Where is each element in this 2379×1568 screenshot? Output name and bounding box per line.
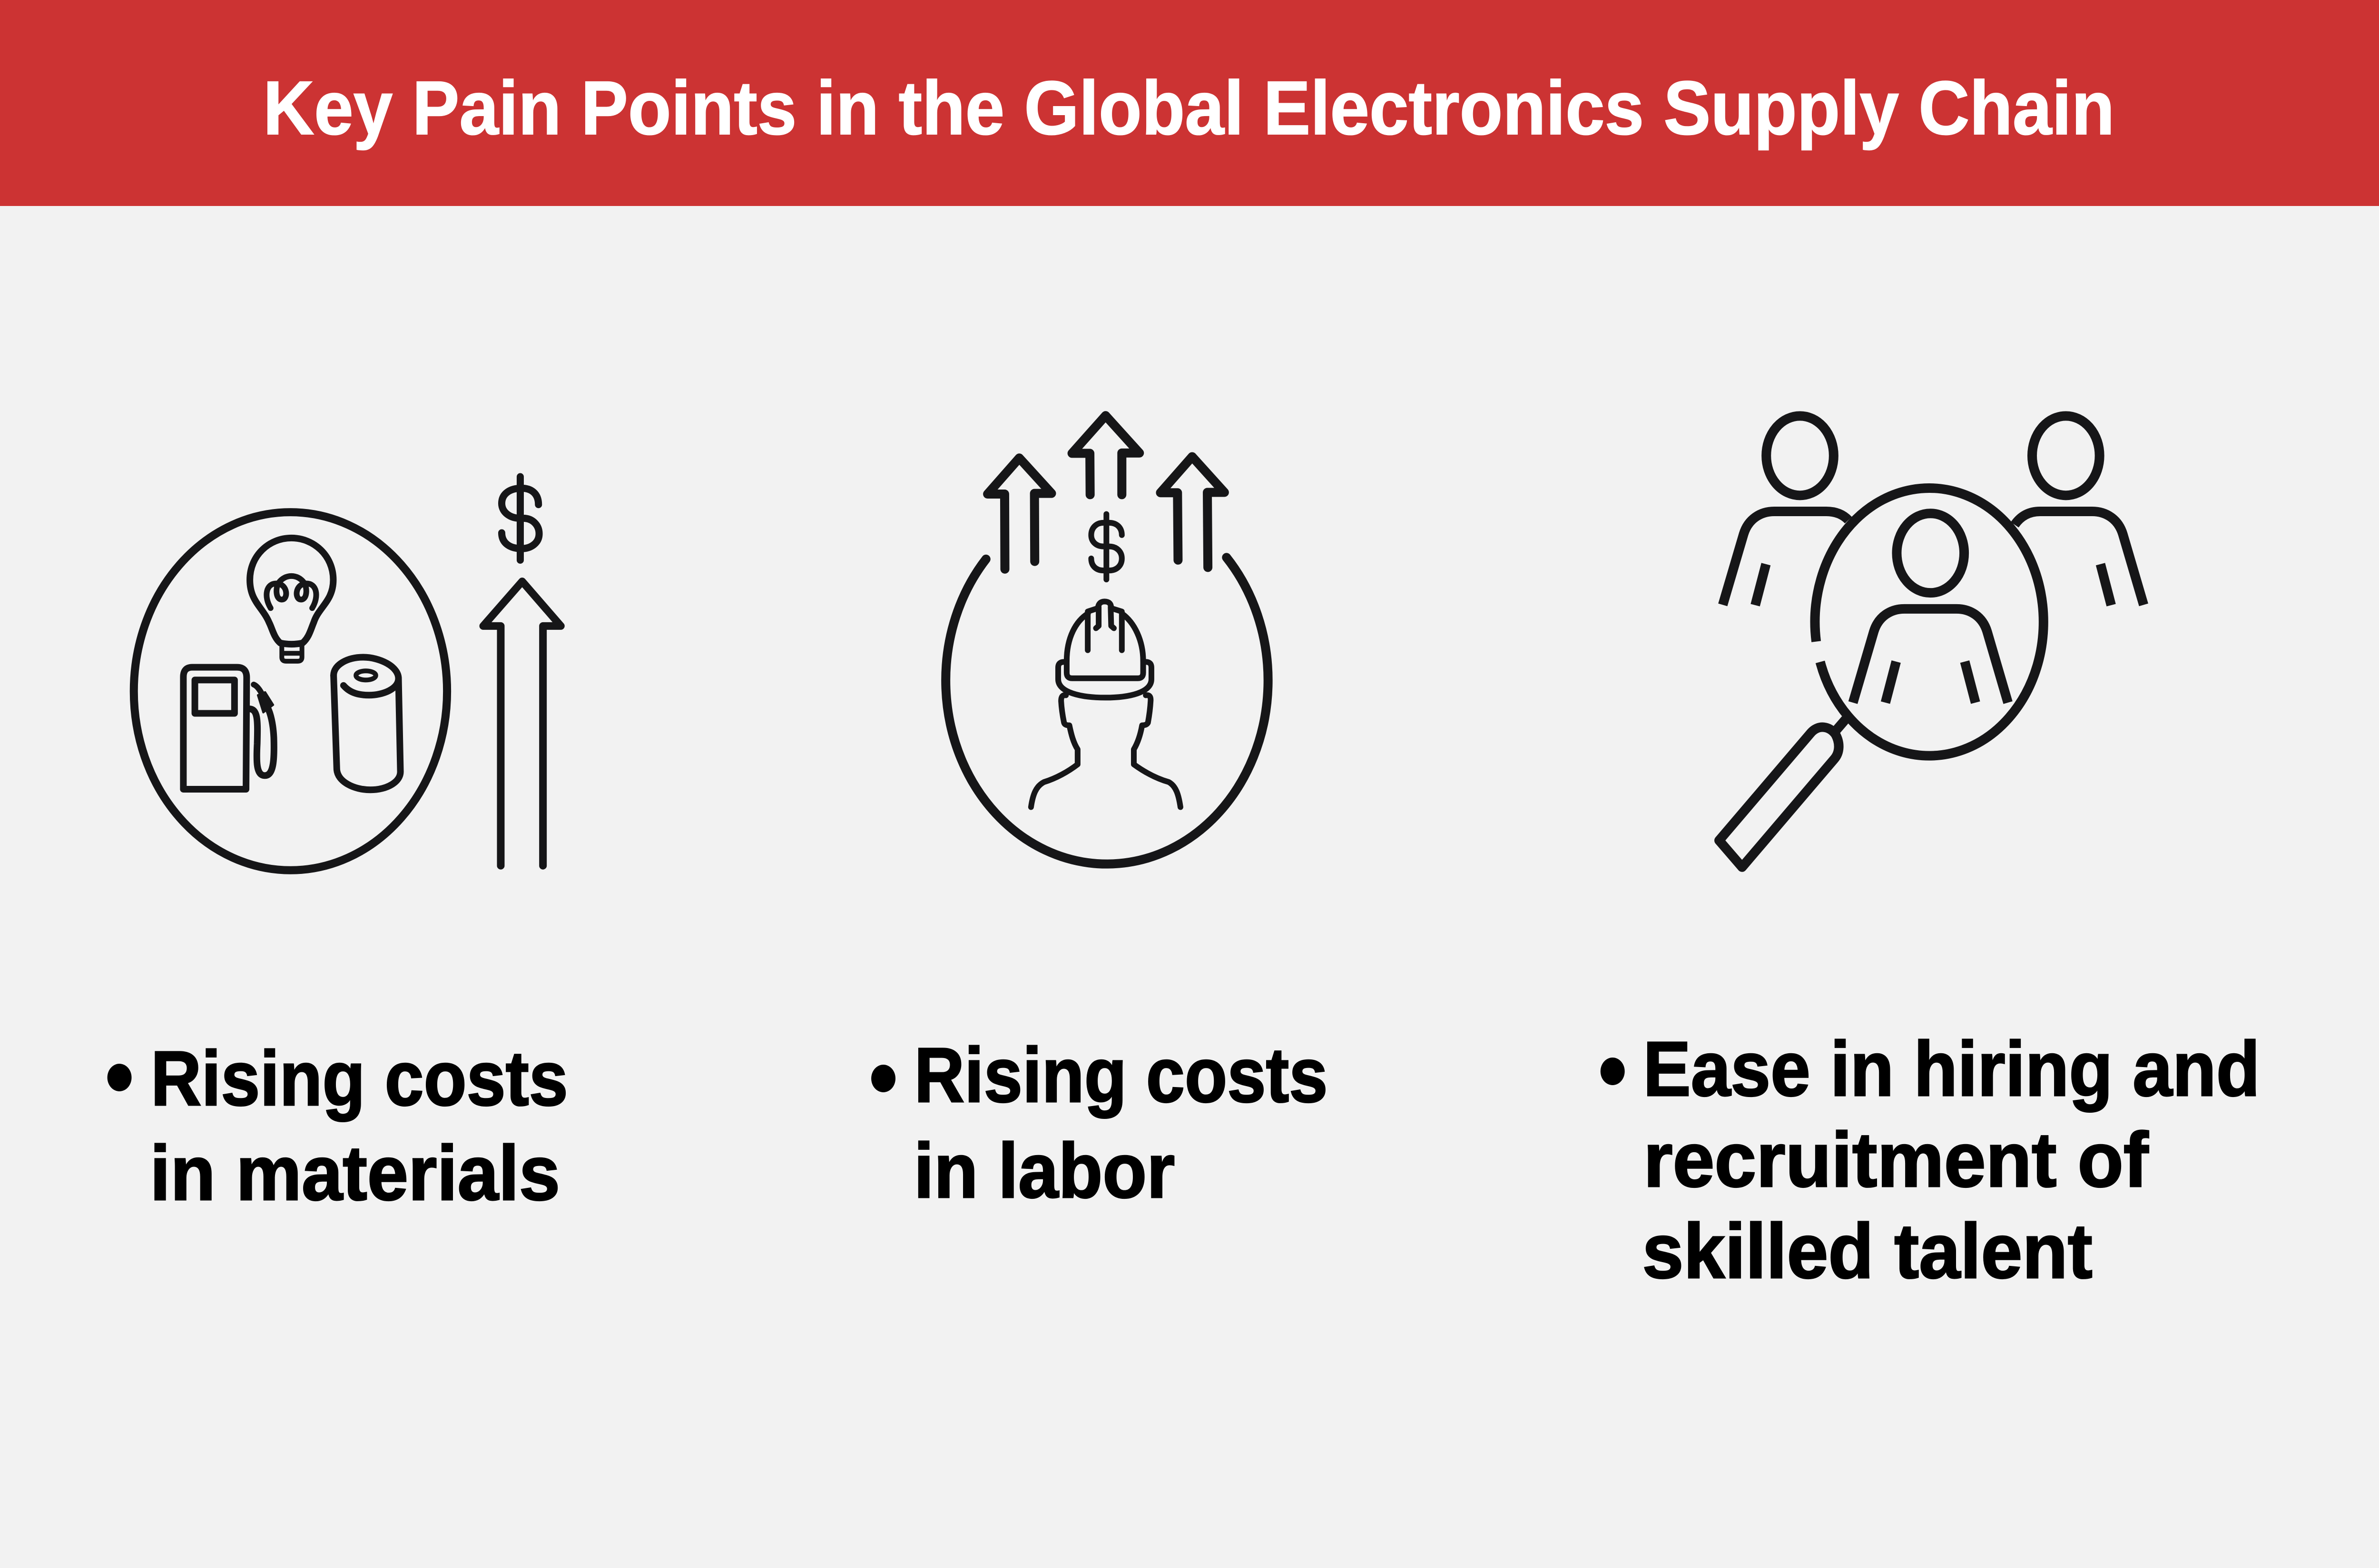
icon: enclosing circle xyxy=(134,512,447,870)
text: rising costs in materials xyxy=(108,1035,568,1216)
icon: centre person xyxy=(1853,513,2008,703)
header banner xyxy=(0,0,2379,206)
icon: left person xyxy=(1723,416,1848,605)
icon: roll of material xyxy=(334,657,401,790)
title: Key Pain Points in the Global Electronics Supply Chain xyxy=(263,65,2114,150)
panel: rising costs in labor xyxy=(871,416,1328,1214)
panel: rising costs in materials xyxy=(108,477,568,1216)
icon: dollar sign xyxy=(501,477,539,560)
text: ease in hiring and recruitment of skilled talent: recruitment of xyxy=(1643,1117,2149,1203)
text: rising costs in labor: in labor xyxy=(914,1127,1175,1214)
icon: worker with rising costs xyxy=(946,416,1268,864)
icon: materials in a circle with rising dollar arrow xyxy=(134,477,561,870)
icon: open circle xyxy=(946,558,1268,864)
icon: up arrow xyxy=(483,581,561,866)
text: rising costs in materials: Rising costs xyxy=(151,1035,568,1122)
panel: ease in hiring and recruitment xyxy=(1601,416,2260,1294)
text: rising costs in labor: Rising costs xyxy=(914,1032,1328,1118)
text: ease in hiring and recruitment of skilled talent: Ease in hiring and xyxy=(1643,1026,2260,1112)
icon: three up arrows xyxy=(988,416,1224,569)
icon: magnifier xyxy=(1719,488,2044,867)
text: rising costs in labor xyxy=(871,1032,1328,1214)
icon: light bulb xyxy=(250,538,333,661)
icon: magnifier over people xyxy=(1719,416,2143,867)
text: rising costs in materials: in materials xyxy=(150,1130,560,1216)
icon: fuel pump xyxy=(183,667,274,789)
text: ease in hiring and recruitment of skilled talent: skilled talent xyxy=(1642,1208,2093,1294)
icon: right person xyxy=(2015,416,2143,605)
icon: dollar sign xyxy=(1091,514,1122,579)
icon: worker in hard hat xyxy=(1031,601,1180,807)
text: ease in hiring and recruitment of skilled talent xyxy=(1601,1026,2260,1294)
